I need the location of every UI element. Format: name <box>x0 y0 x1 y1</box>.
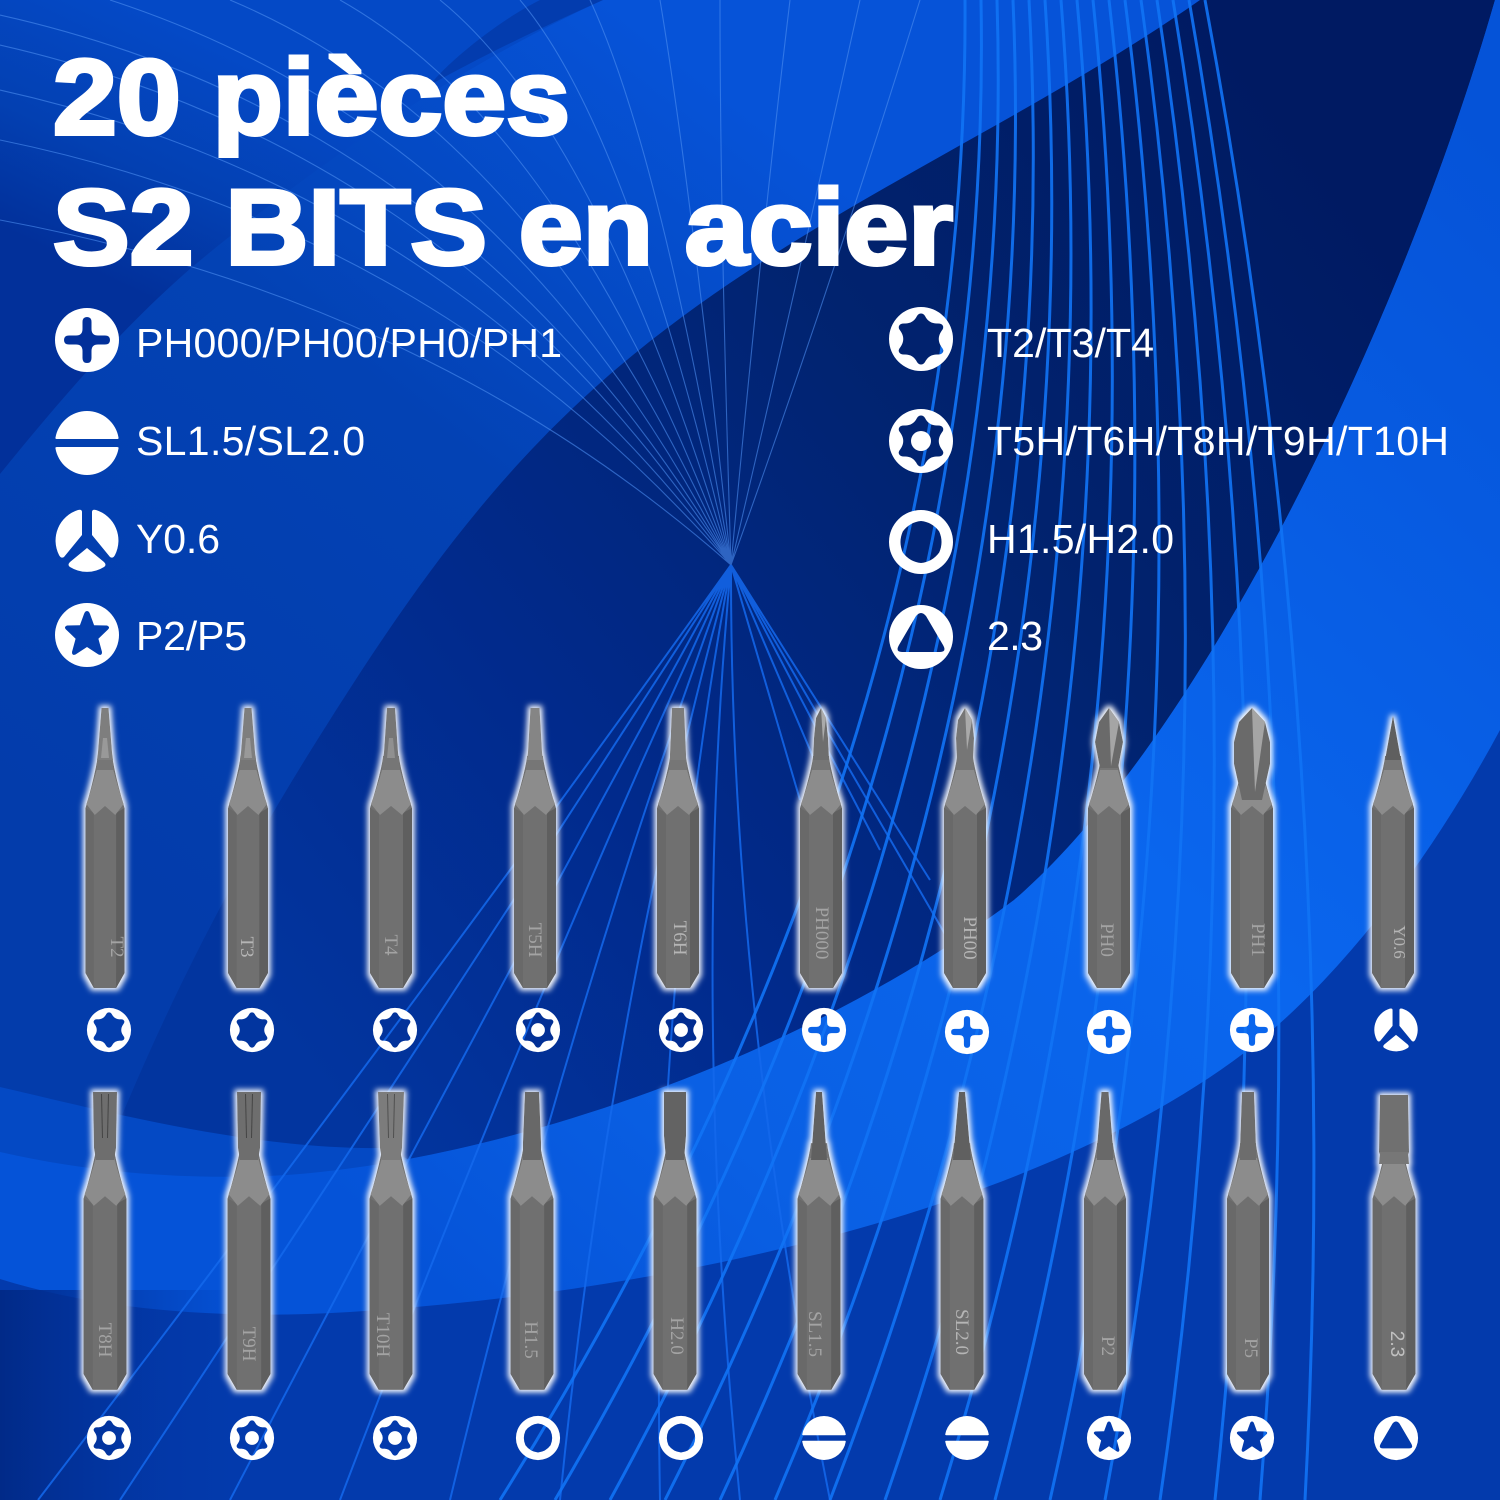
bit T6H: T6H <box>669 921 690 956</box>
icon 2.3 <box>1374 1416 1418 1460</box>
bit T5H: T5H <box>524 923 545 958</box>
label: triangle size: 2.3 <box>987 613 1043 659</box>
label: pentalobe sizes: P2/P5 <box>136 613 247 659</box>
icon: hex <box>889 510 953 574</box>
bit H2.0: H2.0 <box>666 1317 687 1355</box>
bit T2 <box>85 708 127 988</box>
icon T5H <box>516 1008 560 1052</box>
bit PH0: PH0 <box>1096 923 1117 957</box>
bit T3 <box>228 708 268 988</box>
bit H1.5 <box>511 1092 553 1390</box>
bit PH0 <box>1088 708 1130 988</box>
type icons row 2 <box>87 1416 1418 1460</box>
bit SL2.0: SL2.0 <box>951 1309 972 1355</box>
icon: pentalobe <box>55 603 119 667</box>
bit T6H <box>657 708 699 988</box>
bit P2: P2 <box>1097 1336 1118 1356</box>
bit T8H: T8H <box>94 1323 115 1358</box>
icon PH00 <box>945 1010 989 1054</box>
icon T6H <box>659 1008 703 1052</box>
icon H2.0 <box>659 1416 703 1460</box>
bit T4 <box>370 708 412 988</box>
bit SL1.5: SL1.5 <box>804 1311 825 1357</box>
icon SL1.5 <box>802 1416 846 1460</box>
icon Y0.6 <box>1374 1008 1418 1051</box>
icon P5 <box>1230 1416 1274 1460</box>
icon T10H <box>373 1416 417 1460</box>
type icons row 1 <box>87 1008 1418 1054</box>
bit SL1.5 <box>798 1092 840 1390</box>
bit T5H <box>514 708 556 988</box>
bit T9H: T9H <box>238 1327 259 1362</box>
icon: security torx <box>889 409 953 473</box>
title line 2: S2 BITS en acier <box>53 167 953 287</box>
bit P2 <box>1084 1092 1126 1390</box>
icon: triangle <box>889 605 953 669</box>
icon PH0 <box>1087 1010 1131 1054</box>
icon T9H <box>230 1416 274 1460</box>
label: slotted sizes: SL1.5/SL2.0 <box>136 418 365 464</box>
label: Y size: Y0.6 <box>136 516 220 562</box>
bit SL2.0 <box>941 1092 983 1390</box>
bit 2.3 <box>1373 1095 1415 1390</box>
icon: slotted <box>55 411 119 475</box>
bit PH000 <box>800 708 842 988</box>
icon T8H <box>87 1416 131 1460</box>
bit PH1 <box>1231 708 1273 988</box>
bit PH00 <box>944 708 986 988</box>
icon: torx <box>889 307 953 371</box>
title line 1: 20 pièces <box>53 37 570 157</box>
bit T3: T3 <box>236 936 257 958</box>
title <box>53 37 953 287</box>
label: torx sizes: T2/T3/T4 <box>987 320 1154 366</box>
icon: phillips <box>55 308 119 372</box>
bit PH00: PH00 <box>959 916 980 960</box>
icon SL2.0 <box>945 1416 989 1460</box>
bit Y0.6: Y0.6 <box>1390 925 1409 959</box>
label: security torx sizes: T5H/T6H/T8H/T9H/T10H <box>987 418 1449 464</box>
icon: tri-wing Y <box>56 510 118 572</box>
icon T3 <box>230 1008 274 1052</box>
icon T4 <box>373 1008 417 1052</box>
bit T8H <box>84 1092 126 1390</box>
icon P2 <box>1087 1416 1131 1460</box>
bit T10H: T10H <box>372 1313 393 1357</box>
bit P5 <box>1227 1092 1269 1390</box>
bit H1.5: H1.5 <box>520 1321 541 1359</box>
bit PH000: PH000 <box>811 907 832 959</box>
label: phillips sizes: PH000/PH00/PH0/PH1 <box>136 320 562 366</box>
bit T2: T2 <box>106 936 127 958</box>
bit 2.3: 2.3 <box>1386 1331 1407 1357</box>
bits row 2 <box>84 1092 1415 1390</box>
icon PH000 <box>802 1008 846 1052</box>
icon PH1 <box>1230 1008 1274 1052</box>
bit Y0.6 <box>1372 716 1414 988</box>
bit P5: P5 <box>1240 1338 1261 1358</box>
bit T9H <box>228 1092 270 1390</box>
bit T4: T4 <box>380 934 401 956</box>
bit H2.0 <box>654 1092 696 1390</box>
icon T2 <box>87 1008 131 1052</box>
label: hex sizes: H1.5/H2.0 <box>987 516 1174 562</box>
legend: left column <box>55 308 562 667</box>
icon H1.5 <box>516 1416 560 1460</box>
legend: right column <box>889 307 1449 669</box>
bit PH1: PH1 <box>1247 923 1268 957</box>
bit T10H <box>370 1092 412 1390</box>
bits row 1 <box>85 708 1414 988</box>
